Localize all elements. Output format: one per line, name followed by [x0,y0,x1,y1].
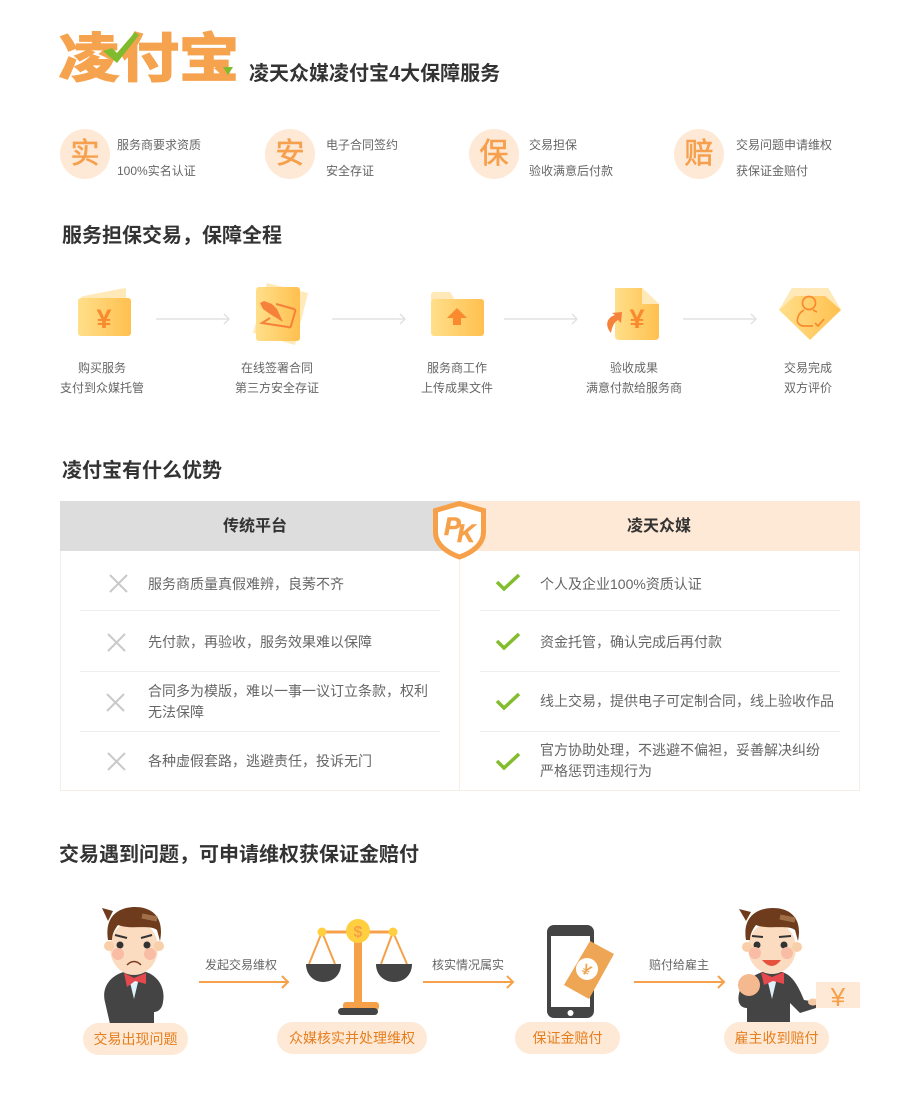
step 1 text: 购买服务 [78,361,126,375]
comparison table: 无法保障 [148,704,204,720]
header: traditional [60,501,460,551]
character: happy employer [738,908,860,1022]
label: transaction problem: 交易出现问题 [94,1031,178,1047]
arrow: raise claim: 发起交易维权 [205,958,277,972]
feature: 实: 服务商要求资质 [117,138,201,152]
feature: 赔: 赔 [684,138,714,170]
left rows text: 服务商质量真假难辨，良莠不齐 [148,576,344,592]
label: employer receives: 雇主收到赔付 [734,1030,818,1046]
label: transaction problem [83,1023,188,1055]
comparison table: 官方协助处理，不逃避不偏袒，妥善解决纠纷 [540,742,820,758]
arrow: verify: 核实情况属实 [432,958,504,972]
header: lingtian: 凌天众媒 [627,518,691,535]
icon: scales: $ [354,924,363,941]
comparison table: 先付款，再验收，服务效果难以保障 [148,634,372,650]
feature: 保: 保 [479,138,508,170]
feature: 赔: 获保证金赔付 [736,164,808,178]
heading: process: 服务担保交易，保障全程 [62,225,282,247]
process icons and arrows: ¥ [96,304,112,334]
feature: 安 [265,129,398,179]
feature: 保: 交易担保 [529,138,577,152]
step 3 text [421,361,493,395]
comparison table: 严格惩罚违规行为 [540,763,652,779]
PK shield [433,500,486,560]
step 5 text [784,361,832,395]
label: verification [277,1022,427,1054]
feature: 保 [469,129,613,179]
feature: 保: 验收满意后付款 [529,164,613,178]
step 5 text: 交易完成 [784,361,832,375]
comparison table: 资金托管，确认完成后再付款 [540,634,722,650]
character: happy employer: ¥ [830,982,846,1012]
character: worried employer [102,907,164,1023]
feature: 实: 100%实名认证 [117,164,196,178]
arrow: verify [423,958,514,989]
heading: advantages: 凌付宝有什么优势 [62,460,222,482]
step 2 text [235,361,319,395]
label: verification: 众媒核实并处理维权 [289,1030,415,1046]
comparison table: 各种虚假套路，逃避责任，投诉无门 [148,753,372,769]
icon: phone with banknote [547,925,614,1018]
feature: 赔: 交易问题申请维权 [736,138,832,152]
header: lingtian [460,501,860,551]
cross icons [106,574,128,771]
label: deposit payout [515,1022,620,1054]
feature: 安: 安全存证 [326,164,374,178]
comparison table [60,501,860,791]
label: employer receives [724,1022,829,1054]
step 1 text: 支付到众媒托管 [60,381,144,395]
step 4 text [586,361,682,395]
icon: scales [306,919,412,1015]
header: traditional: 传统平台 [223,518,287,535]
heading: claims: 交易遇到问题，可申请维权获保证金赔付 [59,844,419,866]
step 1 text [60,361,144,395]
logo: 凌付宝 [59,29,239,88]
right rows text: 个人及企业100%资质认证 [540,576,702,592]
feature: 赔 [674,129,832,179]
arrow: pay employer: 赔付给雇主 [649,958,709,972]
process icons and arrows: ¥ [629,304,645,334]
frame [60,501,860,791]
comparison table: 合同多为模版，难以一事一议订立条款，权利 [148,683,428,699]
icon: phone with banknote: ¥ [578,961,595,980]
check icons [496,574,520,770]
feature: 安: 电子合同签约 [326,138,398,152]
step 4 text: 满意付款给服务商 [586,381,682,395]
step 3 text: 上传成果文件 [421,381,493,395]
PK shield: K [457,520,477,548]
step 5 text: 双方评价 [784,381,832,395]
comparison table: 线上交易，提供电子可定制合同，线上验收作品 [540,693,834,709]
step 4 text: 验收成果 [610,361,658,375]
step 3 text: 服务商工作 [427,361,487,375]
arrow: pay employer [634,958,726,989]
feature: 实: 实 [70,138,100,170]
feature: 安: 安 [275,138,304,170]
title: 凌天众媒凌付宝4大保障服务 [249,63,500,85]
arrow: raise claim [199,958,290,989]
step 2 text: 第三方安全存证 [235,381,319,395]
process icons and arrows [78,283,841,345]
feature: 实 [60,129,201,179]
PK shield: P [444,513,461,541]
step 2 text: 在线签署合同 [241,361,313,375]
label: deposit payout: 保证金赔付 [532,1030,602,1046]
